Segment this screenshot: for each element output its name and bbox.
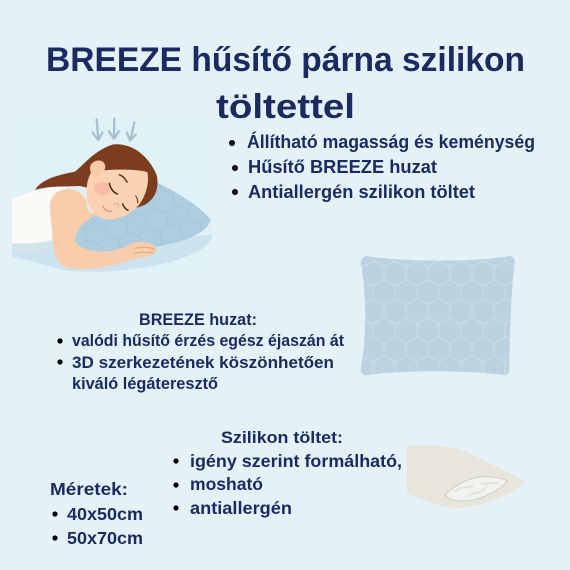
pillow [74,183,211,252]
pillow shadow [12,235,212,272]
bullet list: key features: Antiallergén szilikon töltet [248,182,475,202]
text block: silicone filling: igény szerint formálható, [190,451,402,471]
text block: silicone filling: mosható [190,474,263,494]
photo: silicone-filled pillow [406,445,526,508]
text block: silicone filling: antiallergén [190,498,292,518]
text block: BREEZE cover: 3D szerkezetének köszönhetően [72,353,334,372]
text block: sizes [50,479,143,548]
eyes, brow, mouth [103,175,138,211]
text block: silicone filling: Szilikon töltet: [221,428,343,447]
text block: sizes: Méretek: [50,479,128,499]
bullet list: key features: Hűsítő BREEZE huzat [248,157,437,177]
text block: BREEZE cover: kiváló légáteresztő [72,374,218,393]
illustration: woman sleeping on pillow [12,117,213,272]
title: BREEZE hűsítő párna szilikon [46,41,525,79]
illustration backdrop [12,117,213,272]
text block: BREEZE cover [57,310,344,393]
title: töltettel [216,88,355,126]
text block: BREEZE cover: BREEZE huzat: [139,310,257,329]
body and arm [50,189,156,269]
text block: sizes: 50x70cm [67,528,143,548]
bullet list: key features: Állítható magasság és keménység [247,131,535,152]
text block: silicone filling [173,428,402,518]
ear [90,161,105,176]
text block: BREEZE cover: valódi hűsítő érzés egész éjaszán át [72,331,344,350]
cheek [94,182,110,195]
title [46,41,525,126]
photo: blue BREEZE pillow [361,256,515,375]
hair [35,144,158,208]
bullet list: key features [229,131,535,202]
text block: sizes: 40x50cm [67,504,143,524]
icon: cooling arrows [93,119,136,141]
face [87,170,148,219]
towel [12,187,67,243]
